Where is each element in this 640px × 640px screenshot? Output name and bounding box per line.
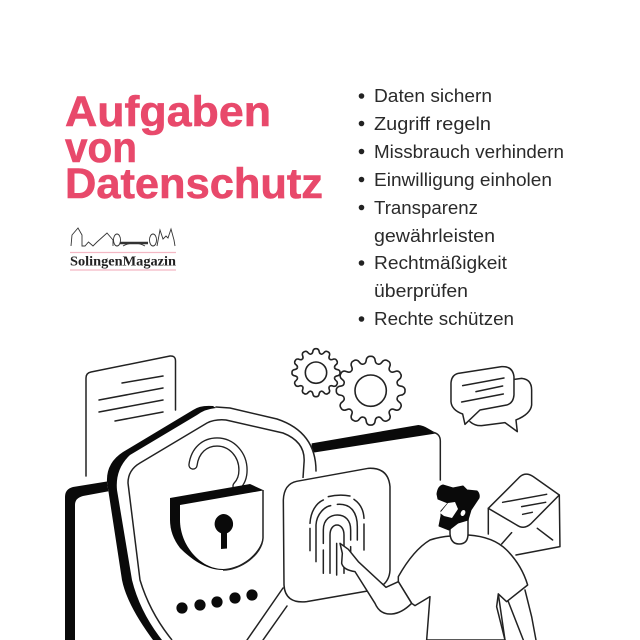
title: Datenschutz: [65, 160, 323, 208]
shield thick left edge: [107, 406, 216, 640]
padlock shackle: [193, 442, 243, 486]
ear: [460, 509, 466, 517]
padlock body: [170, 484, 263, 570]
title: von: [65, 124, 137, 172]
logo wordmark: SolingenMagazin: [70, 254, 177, 268]
bullet list: Daten sichern: [374, 86, 492, 106]
laptop screen back: [65, 481, 110, 640]
icon: chat bubbles: [451, 367, 532, 432]
body: [340, 535, 536, 640]
keyhole: [215, 514, 233, 549]
right arm: [497, 590, 536, 640]
shield body: [107, 406, 316, 640]
card: [283, 468, 390, 602]
bullet list: [359, 86, 564, 329]
bullet list: Zugriff regeln: [374, 114, 491, 134]
hair and beard: [437, 485, 479, 530]
password dots: [176, 589, 258, 614]
person: [340, 485, 536, 640]
face: [440, 502, 458, 518]
title: [65, 88, 323, 208]
neck: [450, 514, 468, 544]
fingerprint: [310, 495, 364, 575]
torso: [398, 535, 528, 640]
icon: document: [86, 356, 176, 476]
title: Aufgaben: [65, 88, 271, 136]
icon: envelope: [488, 474, 560, 555]
bullet list: gewährleisten: [374, 226, 495, 246]
bullet list: Rechte schützen: [374, 309, 514, 329]
icon: gears: [292, 349, 405, 425]
bullet list: Transparenz: [374, 198, 478, 218]
bullet list: Einwilligung einholen: [374, 170, 552, 190]
pointing arm and hand: [340, 543, 412, 614]
bullet list: überprüfen: [374, 281, 468, 301]
fingerprint card: [283, 468, 390, 602]
shield outer line: [216, 407, 316, 640]
illustration: data protection: [65, 349, 560, 640]
logo rules: [70, 252, 176, 270]
shield: [107, 406, 316, 640]
logo: SolingenMagazin: [70, 228, 177, 270]
bullet list: Rechtmäßigkeit: [374, 253, 507, 273]
bullet list: Missbrauch verhindern: [374, 142, 564, 162]
logo skyline: [71, 228, 175, 246]
laptop screen top edge: [312, 425, 440, 480]
shield inner line: [128, 420, 304, 640]
